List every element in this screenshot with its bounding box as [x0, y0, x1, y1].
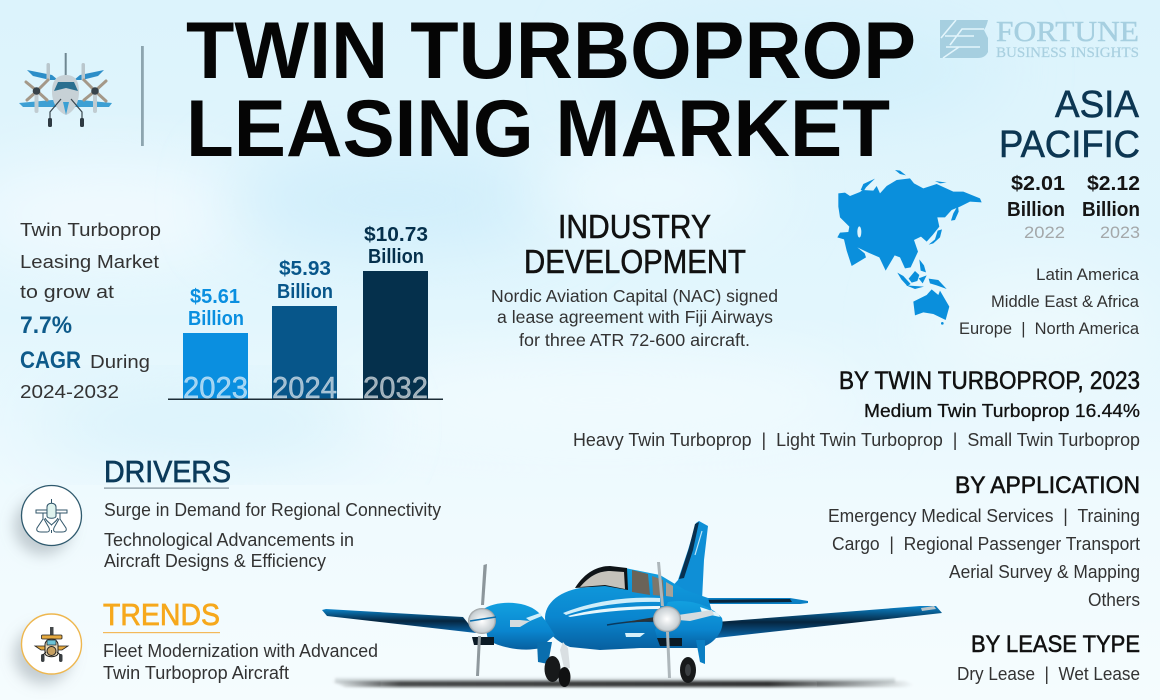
- bar chart: [168, 224, 443, 405]
- main gear: [537, 642, 552, 664]
- panel: drivers: Technological Advancements in: [104, 530, 354, 550]
- panel: trends: [103, 597, 378, 683]
- right nacelle: [655, 601, 723, 648]
- icon: drivers plane: [14, 486, 82, 555]
- bar chart: 2032: [363, 370, 428, 405]
- panel: by lease type: BY LEASE TYPE: [971, 631, 1140, 658]
- panel: trends: Twin Turboprop Aircraft: [103, 663, 289, 683]
- stats: Asia Pacific values: [1007, 173, 1140, 242]
- bar chart: $5.93: [279, 258, 331, 280]
- stats: Asia Pacific values: $2.01: [1011, 173, 1065, 195]
- title: LEASING MARKET: [186, 84, 890, 174]
- panel: by application: BY APPLICATION: [955, 472, 1140, 499]
- logo: Fortune Business Insights: BUSINESS INSIGHTS: [996, 45, 1139, 61]
- icon: trends plane: [14, 614, 82, 684]
- bar chart: $10.73: [364, 224, 428, 246]
- fuselage: [545, 568, 716, 650]
- left nacelle: [482, 603, 555, 650]
- panel: by twin turboprop: [573, 367, 1140, 450]
- panel: industry development: DEVELOPMENT: [524, 243, 746, 280]
- regions list: Latin America: [1036, 265, 1140, 284]
- panel: by application: Aerial Survey & Mapping: [949, 562, 1140, 582]
- bar chart: Billion: [277, 281, 333, 303]
- panel: drivers: Aircraft Designs & Efficiency: [104, 551, 326, 571]
- regions list: Europe | North America: [959, 319, 1140, 338]
- panel: industry development: for three ATR 72-600 aircraft.: [519, 330, 750, 350]
- text: market growth: CAGR: [20, 347, 81, 374]
- panel: by application: [828, 472, 1140, 610]
- ground shadow: [330, 678, 915, 687]
- title: [186, 6, 916, 174]
- regions list: [959, 265, 1140, 338]
- panel: by application: Cargo | Regional Passenger Transport: [832, 534, 1140, 554]
- stabilizer: [690, 598, 808, 604]
- panel: industry development: [491, 208, 778, 350]
- regions list: Middle East & Africa: [991, 292, 1140, 311]
- panel: drivers: Surge in Demand for Regional Connectivity: [104, 500, 441, 520]
- panel: by lease type: [957, 631, 1140, 684]
- panel: by twin turboprop: Heavy Twin Turboprop | Light Twin Turboprop | Small Twin Turboprop: [573, 430, 1140, 450]
- windows: [575, 566, 628, 590]
- heading: Asia Pacific: [999, 84, 1140, 166]
- right wing: [716, 606, 942, 638]
- stats: Asia Pacific values: 2022: [1024, 223, 1065, 242]
- divider line: [141, 46, 144, 146]
- panel: by application: Emergency Medical Services | Training: [828, 506, 1140, 526]
- heading: Asia Pacific: ASIA: [1055, 84, 1140, 126]
- panel: by lease type: Dry Lease | Wet Lease: [957, 664, 1140, 684]
- stats: Asia Pacific values: $2.12: [1087, 173, 1140, 195]
- stats: Asia Pacific values: 2023: [1100, 223, 1140, 242]
- tail fin: [660, 521, 708, 600]
- logo: Fortune Business Insights: [940, 17, 1139, 61]
- fuselage stripes: [563, 598, 660, 615]
- panel: drivers: [104, 454, 441, 571]
- text: market growth: During: [90, 352, 150, 372]
- bar chart: Billion: [368, 246, 424, 268]
- bar chart: Billion: [188, 308, 244, 330]
- plane photo: [322, 521, 942, 687]
- text: market growth: [20, 220, 161, 402]
- text: market growth: 7.7%: [20, 312, 72, 339]
- panel: by twin turboprop: Medium Twin Turboprop 16.44%: [864, 401, 1140, 421]
- stats: Asia Pacific values: Billion: [1007, 199, 1065, 221]
- bar chart: 2023: [183, 370, 248, 405]
- text: market growth: Leasing Market: [20, 252, 159, 272]
- panel: trends: Fleet Modernization with Advanced: [103, 641, 378, 661]
- panel: drivers: DRIVERS: [104, 454, 231, 489]
- title: TWIN TURBOPROP: [186, 6, 916, 96]
- left propeller: [481, 564, 487, 605]
- heading: Asia Pacific: PACIFIC: [999, 124, 1140, 166]
- panel: by application: Others: [1088, 590, 1140, 610]
- panel: industry development: INDUSTRY: [558, 208, 711, 245]
- icon: small turboprop front view: [19, 53, 112, 127]
- panel: industry development: a lease agreement with Fiji Airways: [497, 307, 773, 327]
- logo: Fortune Business Insights: FORTUNE: [996, 17, 1139, 48]
- map: Asia Pacific: [837, 170, 982, 325]
- right propeller: [657, 562, 664, 606]
- text: market growth: to grow at: [20, 282, 114, 302]
- bar chart: 2024: [272, 370, 337, 405]
- text: market growth: Twin Turboprop: [20, 220, 161, 240]
- panel: industry development: Nordic Aviation Capital (NAC) signed: [491, 286, 778, 306]
- stats: Asia Pacific values: Billion: [1082, 199, 1140, 221]
- text: market growth: 2024-2032: [20, 382, 119, 402]
- bar chart: $5.61: [190, 286, 240, 308]
- panel: trends: TRENDS: [103, 597, 220, 632]
- left wing: [322, 609, 476, 633]
